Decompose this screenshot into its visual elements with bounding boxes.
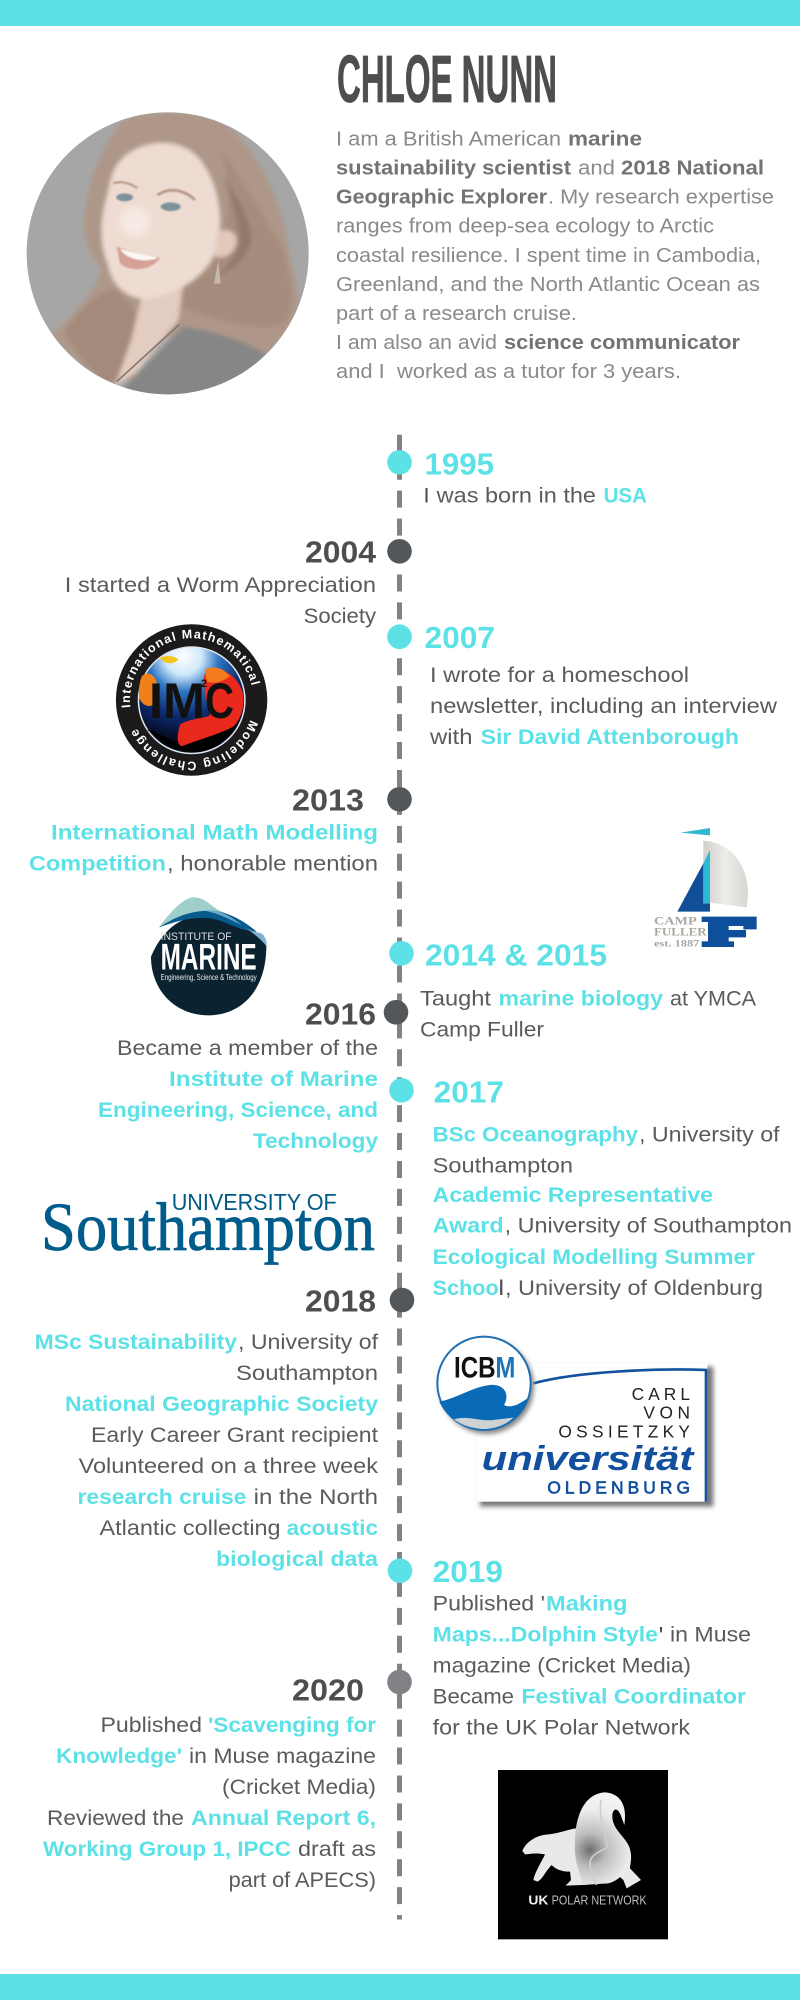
card shadow <box>480 1367 713 1507</box>
text block: introduction: I am also an avid <box>336 331 497 354</box>
event: 2019 <box>388 1554 751 1740</box>
text block: introduction: . My research expertise <box>548 186 774 209</box>
description: in Muse <box>670 1624 751 1647</box>
description: Published <box>100 1714 202 1737</box>
description: research cruise <box>78 1486 246 1509</box>
description: , University of <box>639 1124 780 1147</box>
description: biological data <box>216 1548 378 1571</box>
description: for the UK Polar Network <box>433 1717 691 1740</box>
description: Maps...Dolphin Style <box>433 1624 658 1647</box>
year: 2020 <box>292 1673 364 1708</box>
description <box>98 1037 378 1153</box>
marker <box>387 624 412 649</box>
description: at YMCA <box>670 988 756 1011</box>
logo: Camp Fuller: est. 1887 <box>654 940 700 950</box>
text block: introduction <box>336 128 774 383</box>
logo: Institute of Marine: MARINE <box>161 936 257 977</box>
text block: introduction: ranges from deep-sea ecology to Arctic <box>336 215 714 238</box>
logo: ICBM Carl von Ossietzky Universitaet Oldenburg <box>437 1337 713 1507</box>
bottom band <box>0 1974 800 2000</box>
text block: introduction: marine <box>568 128 642 151</box>
description: marine biology <box>498 988 663 1011</box>
text block: introduction: part of a research cruise. <box>336 302 577 325</box>
description: International Math Modelling <box>51 822 378 845</box>
description: Society <box>304 605 377 628</box>
marker <box>387 450 412 475</box>
logo: International Mathematical Modeling Challenge <box>116 624 268 776</box>
description: I wrote for a homeschool <box>430 664 689 687</box>
text block: introduction: and <box>578 157 615 180</box>
description: in the North <box>254 1486 378 1509</box>
logo: UK Polar Network: POLAR NETWORK <box>552 1893 647 1907</box>
logo: University of Southampton: Southampton <box>41 1189 375 1265</box>
description <box>35 1331 379 1571</box>
description: Southampton <box>433 1155 573 1178</box>
penguin <box>575 1792 630 1885</box>
year: 2007 <box>424 620 495 655</box>
text block: introduction: I am a British American <box>336 128 561 151</box>
description: Southampton <box>236 1362 378 1385</box>
logo: ICBM Carl von Ossietzky Universitaet Oldenburg: VON <box>643 1402 690 1422</box>
year: 2017 <box>434 1074 504 1109</box>
text block: introduction: sustainability scientist <box>336 157 571 180</box>
description <box>429 664 778 749</box>
year: 2018 <box>305 1284 376 1319</box>
logo: University of Southampton: UNIVERSITY OF <box>172 1189 337 1215</box>
year: 2014 & 2015 <box>425 937 607 972</box>
logo: UK Polar Network: UK <box>528 1893 549 1907</box>
marker <box>389 1078 414 1103</box>
description: Making <box>546 1593 628 1616</box>
description: Published ' <box>433 1593 545 1616</box>
description: ' <box>659 1624 663 1647</box>
marker <box>384 1000 408 1025</box>
description <box>433 1593 751 1740</box>
marker <box>389 941 414 966</box>
description: , University of <box>238 1331 378 1354</box>
text block: introduction: Greenland, and the North Atlantic Ocean as <box>336 273 760 296</box>
description <box>424 485 647 508</box>
description <box>29 822 378 876</box>
description: was born in the <box>436 485 596 508</box>
year: 1995 <box>424 446 494 481</box>
ICBM emblem <box>437 1337 534 1434</box>
description: draft as <box>298 1838 376 1861</box>
text block: introduction: Geographic Explorer <box>336 186 547 209</box>
description: BSc Oceanography <box>433 1124 638 1147</box>
logo: Institute of Marine <box>151 897 267 1015</box>
card <box>477 1363 707 1502</box>
description: Volunteered on a three week <box>79 1455 379 1478</box>
event: 2004 <box>65 534 412 628</box>
event: 2013 <box>29 783 412 876</box>
description: MSc Sustainability <box>35 1331 237 1354</box>
description: part of APECS) <box>229 1869 376 1892</box>
description: Working Group 1, IPCC <box>43 1838 291 1861</box>
marker <box>387 1670 412 1694</box>
description: USA <box>604 485 647 508</box>
logo: International Mathematical Modeling Challenge: C <box>205 673 234 729</box>
logo: ICBM Carl von Ossietzky Universitaet Oldenburg: CARL <box>632 1384 690 1404</box>
event: 1995 <box>387 446 647 508</box>
description: Annual Report 6, <box>191 1807 376 1830</box>
description: Knowledge' <box>56 1745 182 1768</box>
description: Competition <box>29 853 166 876</box>
description: Sir David Attenborough <box>481 726 739 749</box>
description <box>43 1714 376 1892</box>
text: CHLOE NUNN <box>337 42 557 117</box>
description: , University of Oldenburg <box>505 1277 763 1300</box>
photo: portrait of Chloe Nunn <box>26 112 309 394</box>
description: Became a member of the <box>117 1037 378 1060</box>
logo: International Mathematical Modeling Challenge: 2 <box>201 678 207 690</box>
description: Academic Representative <box>433 1184 713 1207</box>
logo: International Mathematical Modeling Challenge: IM <box>149 673 205 729</box>
marker <box>388 1558 412 1583</box>
description: magazine (Cricket Media) <box>433 1655 691 1678</box>
description: (Cricket Media) <box>222 1776 376 1799</box>
description: Became <box>433 1686 514 1709</box>
description <box>420 988 756 1042</box>
description: Taught <box>420 988 491 1011</box>
description: Award <box>433 1215 504 1238</box>
text block: introduction: and I worked as a tutor for 3 years. <box>336 360 681 383</box>
description: Reviewed the <box>47 1807 184 1830</box>
year: 2004 <box>305 534 377 569</box>
description <box>65 574 377 628</box>
year: 2013 <box>292 783 364 818</box>
marker <box>387 539 412 564</box>
description: , honorable mention <box>167 853 378 876</box>
logo: UK Polar Network <box>498 1770 668 1939</box>
globe continents <box>139 656 244 752</box>
event: 2020 <box>43 1670 412 1892</box>
event: 2016 <box>98 996 408 1153</box>
description: I started a Worm Appreciation <box>65 574 376 597</box>
ICBM emblem: ICB <box>454 1352 496 1385</box>
logo: Camp Fuller: FULLER <box>654 927 708 939</box>
text block: introduction: science communicator <box>504 331 740 354</box>
description <box>433 1124 792 1300</box>
description: Institute of Marine <box>169 1068 378 1091</box>
event: 2007 <box>387 620 778 749</box>
event: 2017 <box>389 1074 792 1300</box>
description: newsletter, including an interview <box>430 695 778 718</box>
description: Atlantic collecting <box>100 1517 281 1540</box>
logo: Camp Fuller <box>654 828 757 950</box>
logo: Institute of Marine: INSTITUTE OF <box>161 931 232 943</box>
description: 'Scavenging for <box>208 1714 376 1737</box>
text block: introduction: 2018 National <box>621 157 764 180</box>
logo: Camp Fuller: CAMP <box>654 916 697 928</box>
description: Technology <box>253 1130 378 1153</box>
logo: International Mathematical Modeling Challenge: Modeling Challenge <box>132 720 258 770</box>
description: l <box>499 1277 504 1300</box>
description: Festival Coordinator <box>521 1686 746 1709</box>
year: 2016 <box>305 996 376 1031</box>
description: in Muse magazine <box>189 1745 376 1768</box>
description: Schoo <box>433 1277 499 1300</box>
description: National Geographic Society <box>65 1393 378 1416</box>
top band <box>0 0 800 26</box>
description: , University of Southampton <box>505 1215 792 1238</box>
description: Engineering, Science, and <box>98 1099 378 1122</box>
marker <box>390 1288 414 1312</box>
logo: International Mathematical Modeling Challenge: International Mathematical <box>122 630 260 708</box>
text block: introduction: coastal resilience. I spent time in Cambodia, <box>336 244 761 267</box>
description: I <box>424 485 428 508</box>
event: 2014 and 2015 <box>389 937 756 1042</box>
polar bear <box>522 1828 641 1888</box>
marker <box>387 787 412 812</box>
description: Ecological Modelling Summer <box>433 1246 755 1269</box>
description: Camp Fuller <box>420 1019 544 1042</box>
logo: ICBM Carl von Ossietzky Universitaet Oldenburg: OLDENBURG <box>547 1477 690 1497</box>
description: acoustic <box>287 1517 378 1540</box>
event: 2018 <box>35 1284 414 1571</box>
timeline axis <box>397 435 402 1919</box>
year: 2019 <box>433 1554 503 1589</box>
logo: Institute of Marine: Engineering, Science & Technology <box>161 973 257 982</box>
description: Early Career Grant recipient <box>91 1424 378 1447</box>
logo: ICBM Carl von Ossietzky Universitaet Oldenburg: OSSIETZKY <box>558 1421 690 1441</box>
ICBM emblem: M <box>495 1352 515 1385</box>
logo: ICBM Carl von Ossietzky Universitaet Oldenburg: universität <box>482 1440 695 1478</box>
description: with <box>429 726 472 749</box>
